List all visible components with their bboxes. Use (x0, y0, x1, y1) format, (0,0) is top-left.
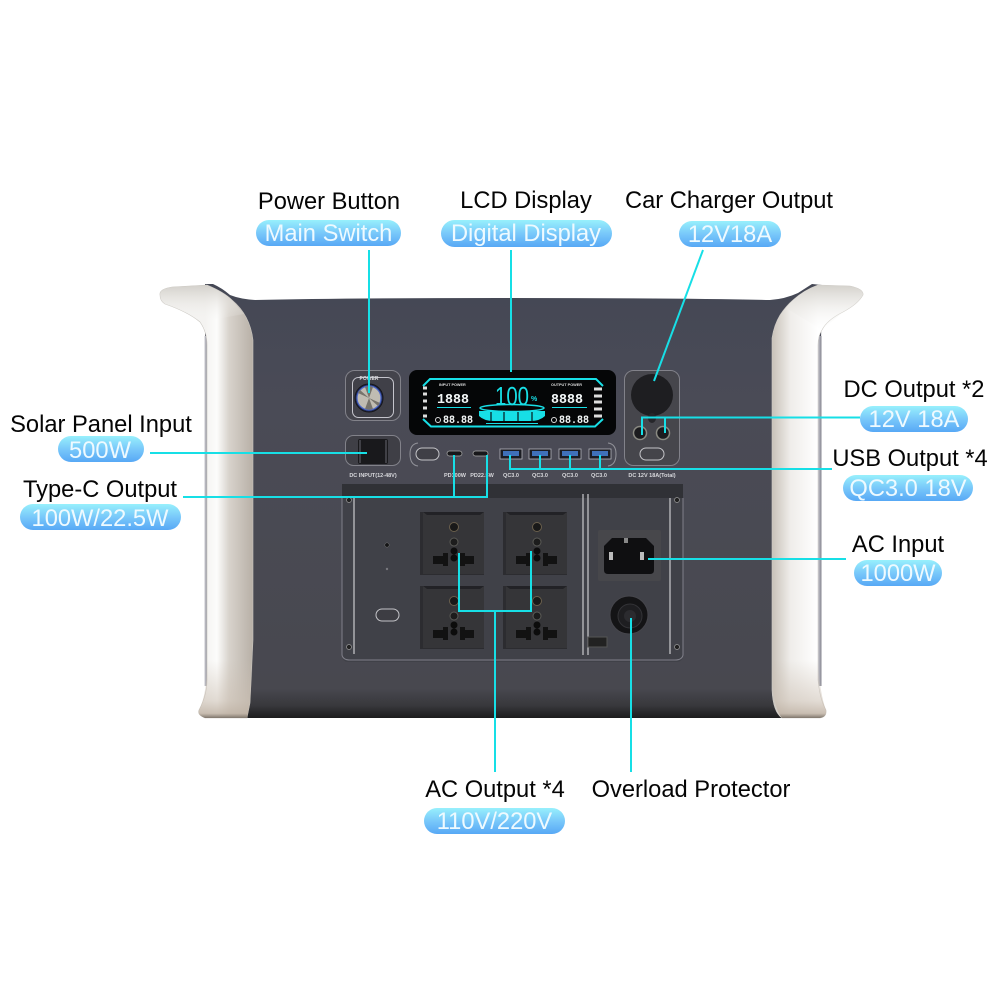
panel: power button: POWER (360, 376, 379, 382)
panel: LCD display: 1888 (437, 392, 469, 408)
callout: LCD display: LCD Display (460, 188, 592, 214)
AC socket 1 (420, 512, 484, 575)
panel: power button (346, 370, 400, 420)
callout: AC output: AC Output *4 (425, 777, 565, 803)
panel: LCD display: 100 (495, 381, 529, 411)
callout: LCD display: Digital Display (451, 221, 601, 247)
callout: power button (256, 189, 401, 247)
callout: AC input (852, 532, 945, 587)
callout: USB output: USB Output *4 (832, 446, 988, 472)
panel: port strip: PD100W (444, 473, 467, 479)
callout: car charger output: Car Charger Output (625, 188, 833, 214)
panel: port strip (410, 443, 616, 479)
panel: LCD display: OUTPUT POWER (551, 383, 582, 387)
callout: solar panel input: Solar Panel Input (10, 412, 192, 438)
AC socket 4 (503, 586, 567, 649)
callout: DC output (844, 377, 984, 433)
panel: LCD display: % (531, 396, 538, 403)
callout: AC output (424, 777, 565, 835)
panel: LCD display: 8888 (551, 392, 583, 408)
panel: port strip: QC3.0 (562, 473, 578, 479)
panel: AC output bay (342, 484, 683, 662)
callout: power button: Power Button (258, 189, 400, 215)
unit body (205, 284, 822, 718)
callout: type-C output: Type-C Output (23, 477, 177, 503)
panel: port strip: PD22.5W (470, 473, 495, 479)
callout: DC output: DC Output *2 (844, 377, 984, 403)
callout: car charger output (625, 188, 833, 248)
callout: USB output (832, 446, 988, 502)
panel: LCD display: INPUT POWER (439, 383, 466, 387)
callout: type-C output (20, 477, 181, 532)
overload protector (610, 596, 648, 634)
callout: overload protector: Overload Protector (592, 777, 791, 803)
panel: LCD display (409, 370, 616, 435)
panel: car charger and DC ports (624, 370, 680, 479)
callout lines (150, 250, 860, 772)
callout: DC output: 12V 18A (869, 407, 960, 433)
callout: AC input: 1000W (860, 561, 936, 587)
panel: solar input switch (346, 436, 400, 479)
callout: solar panel input (10, 412, 192, 464)
callout: power button: Main Switch (265, 221, 392, 247)
callout: AC output: 110V/220V (437, 809, 552, 835)
panel: solar input switch: DC INPUT(12-48V) (349, 473, 397, 479)
AC socket 2 (503, 512, 567, 575)
panel: port strip: QC3.0 (532, 473, 548, 479)
callout: solar panel input: 500W (69, 438, 132, 464)
panel: LCD display: 88.88 (443, 415, 473, 427)
icon: power station unit (160, 284, 863, 718)
callout: LCD display (441, 188, 612, 247)
AC input socket (598, 530, 661, 581)
left handle (160, 285, 253, 718)
AC socket 3 (420, 586, 484, 649)
right handle (772, 285, 863, 718)
callout: AC input: AC Input (852, 532, 945, 558)
panel: port strip: QC3.0 (503, 473, 519, 479)
panel: car charger and DC ports: DC 12V 18A(Total) (628, 473, 676, 479)
panel: port strip: QC3.0 (591, 473, 607, 479)
callout: USB output: QC3.0 18V (849, 476, 967, 502)
callout: car charger output: 12V18A (688, 222, 772, 248)
callout: type-C output: 100W/22.5W (32, 506, 169, 532)
panel: LCD display: 88.88 (559, 415, 589, 427)
